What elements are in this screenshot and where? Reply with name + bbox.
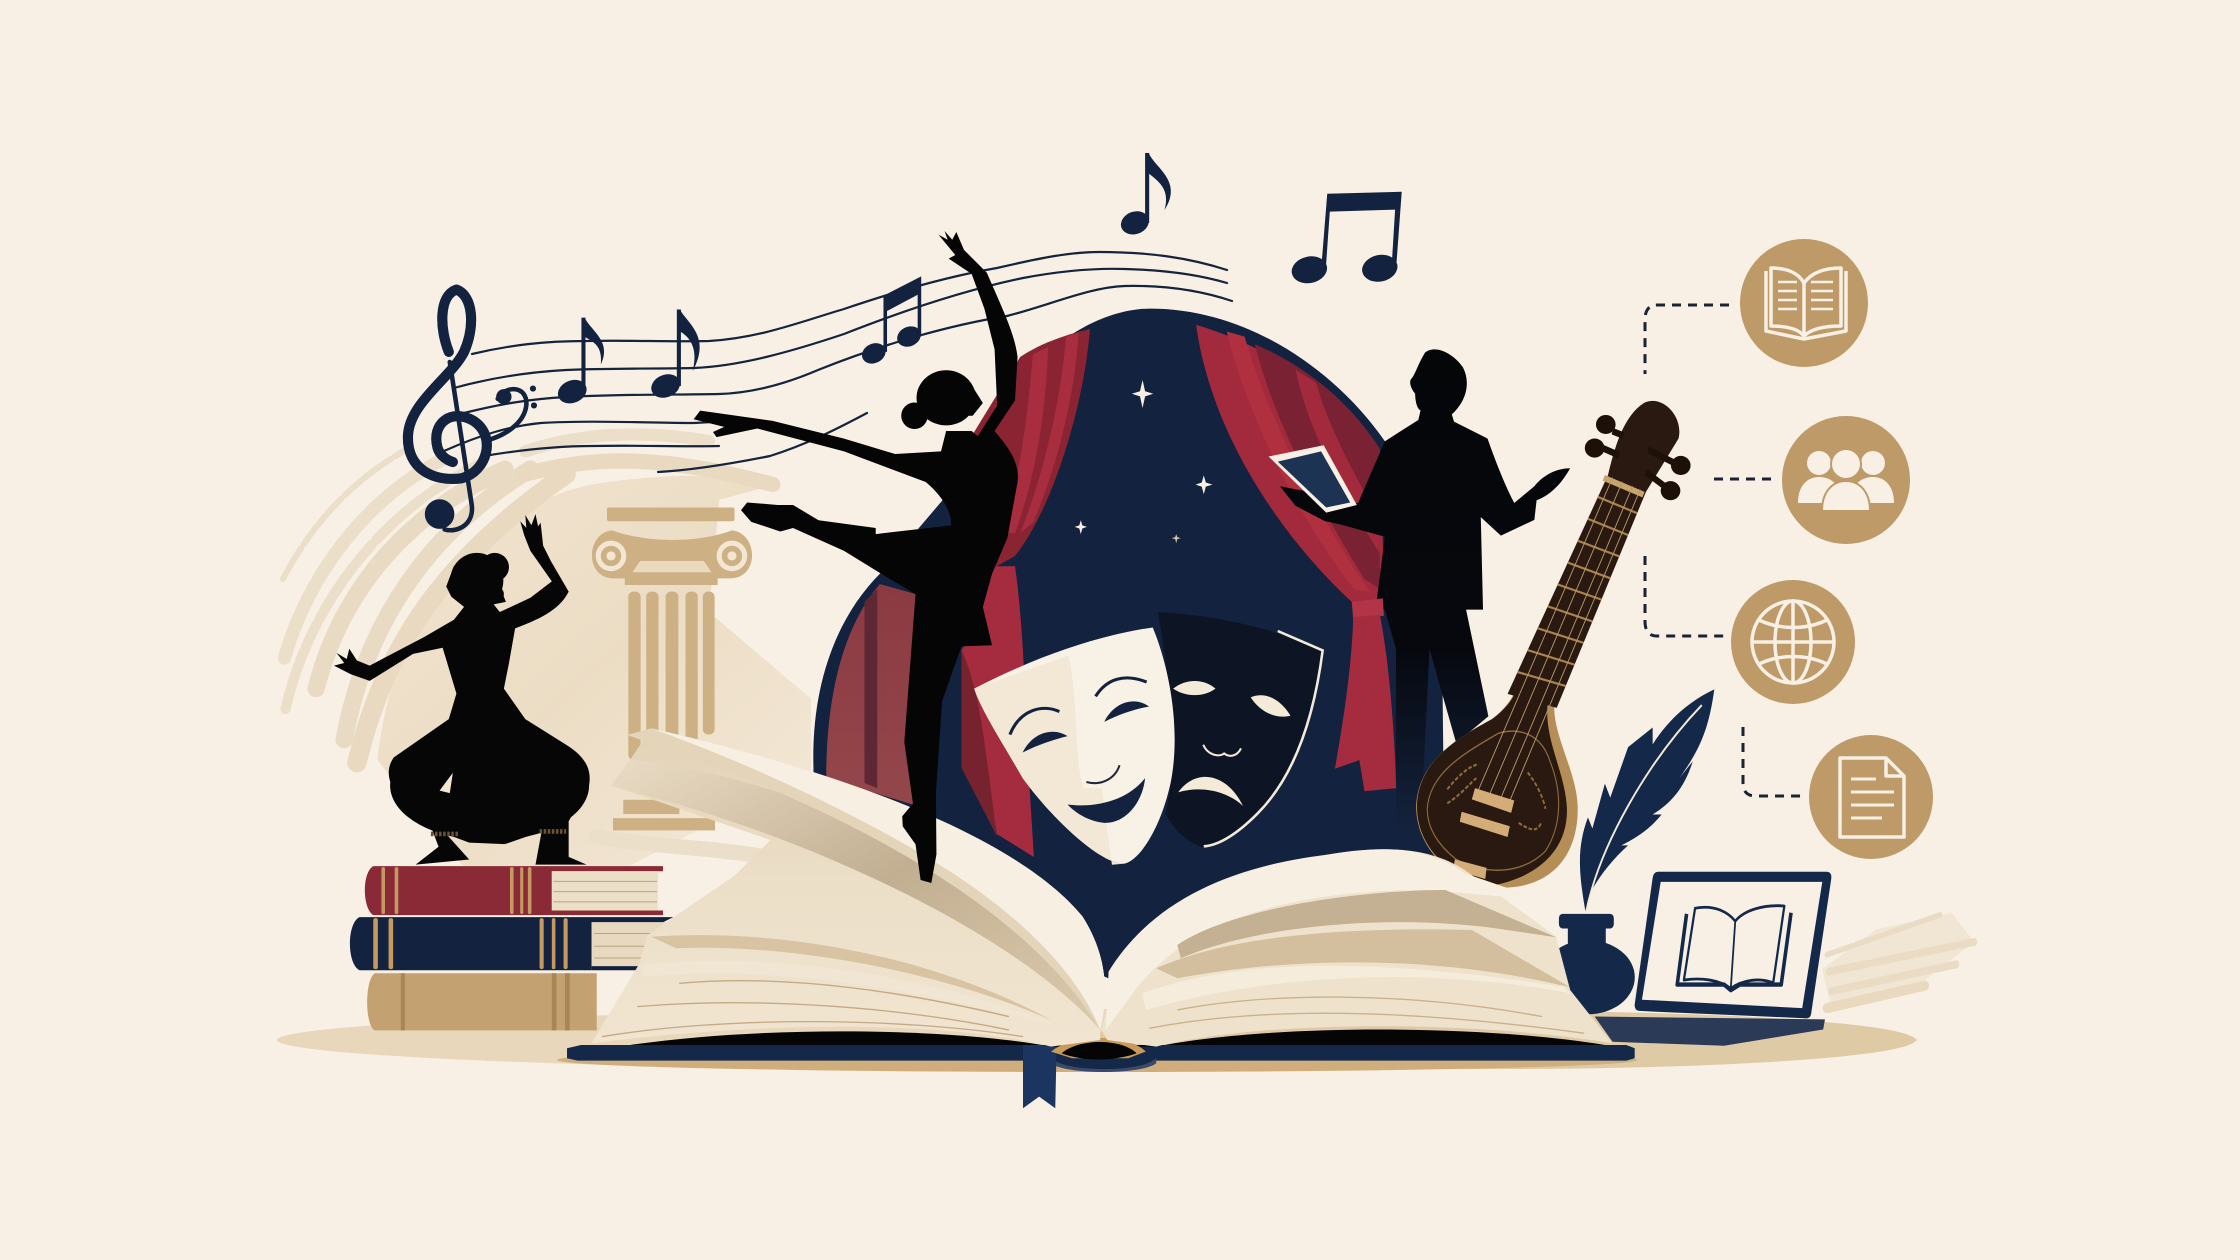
- dashed connector lines: [1645, 305, 1802, 796]
- ink bottle: [1541, 914, 1635, 1014]
- sitar body: [1416, 683, 1578, 888]
- staff notes left: [554, 276, 924, 408]
- laptop with book icon: [1595, 872, 1831, 1046]
- stage backdrop arch: [813, 309, 1446, 997]
- comedy and tragedy masks: [974, 612, 1324, 865]
- curtain: lower left: [826, 584, 926, 809]
- book cover: [567, 1045, 1635, 1072]
- floating music notes: [1118, 153, 1402, 286]
- left page block: [592, 728, 1105, 1047]
- classical dancer silhouette: [334, 514, 590, 865]
- curtain tail tied in front of man: [1335, 598, 1396, 791]
- red book: [365, 866, 663, 915]
- greek column: [592, 507, 752, 830]
- note one: [554, 318, 604, 408]
- beamed sixteenth notes: [859, 276, 924, 367]
- single eighth note: [1118, 153, 1171, 238]
- open book: [567, 728, 1635, 1108]
- left flying pages: [611, 728, 1105, 1030]
- brush strokes behind dancer and column: [283, 434, 811, 867]
- spine arch: [1051, 1038, 1146, 1060]
- music staff lines: [444, 252, 1232, 472]
- icon: people group badge: [1782, 416, 1910, 544]
- shadow under pages: [630, 1030, 1605, 1047]
- navy book: [350, 917, 673, 970]
- icon: document badge: [1809, 735, 1933, 859]
- tragedy mask: [1158, 612, 1324, 847]
- ballerina silhouette: [694, 231, 1018, 883]
- held book: [1269, 445, 1357, 513]
- icon: open book badge: [1740, 239, 1868, 367]
- note two: [648, 309, 700, 402]
- curtain: upper left: [961, 329, 1090, 857]
- stars: [1075, 380, 1212, 543]
- sitar neck and head: [1453, 401, 1691, 884]
- treble clef: [408, 290, 537, 530]
- brush strokes lower right: [1822, 913, 1974, 1008]
- laptop book icon: [1677, 906, 1791, 990]
- comedy mask: [974, 627, 1175, 865]
- sitar instrument: [1416, 401, 1691, 888]
- right page block: [1102, 849, 1612, 1047]
- icon: globe badge: [1731, 580, 1855, 704]
- man reciting from a book: [1280, 349, 1570, 834]
- beamed eighth notes: [1289, 192, 1402, 286]
- ground shadow: [277, 1009, 1917, 1072]
- feather quill: [1580, 689, 1714, 914]
- ribbon bookmark: [1023, 1045, 1057, 1108]
- tan book: [367, 973, 597, 1030]
- stack of books: [350, 866, 673, 1030]
- bass clef: [484, 386, 537, 441]
- curtain: right: [1196, 325, 1385, 607]
